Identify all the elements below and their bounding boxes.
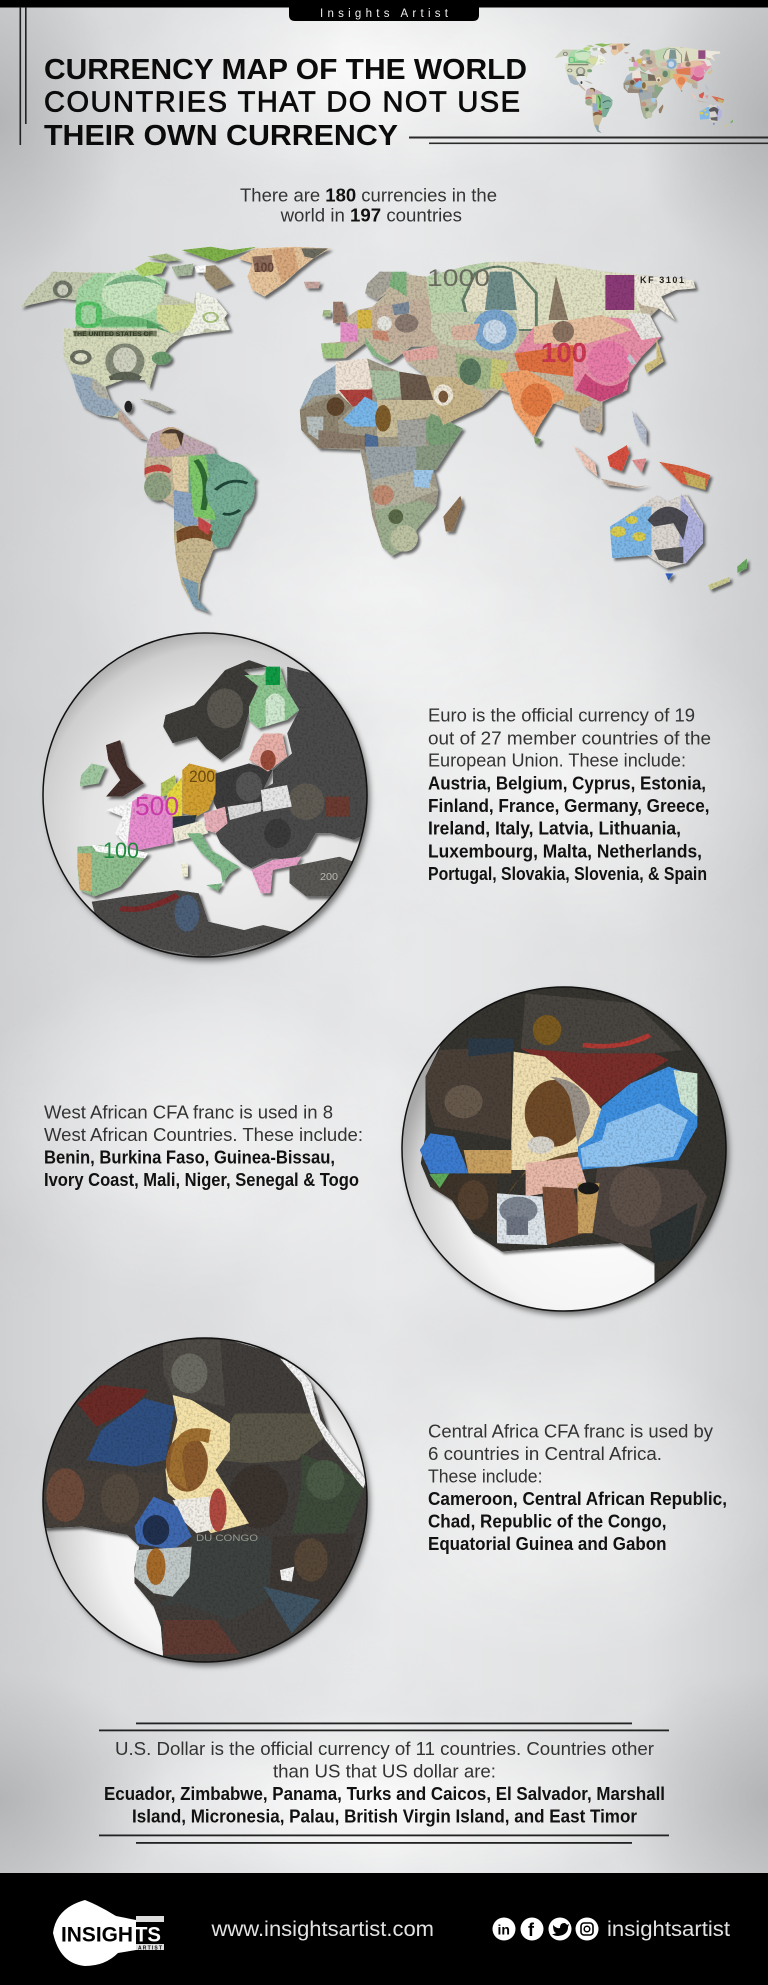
banknote numerals: 200 [189,767,215,786]
Guinea-Bissau and Senegal [420,1133,511,1188]
banknote numerals: 500 [135,791,179,821]
text: West African CFA franc [44,1102,363,1190]
website: www.insightsartist.com [210,1918,434,1941]
dark non-euro Europe [92,660,367,957]
icon: Twitter [548,1918,572,1940]
text: West African CFA franc: West African Countries. These include: [44,1125,363,1145]
social handle: insightsartist [607,1918,730,1941]
banknote numerals [103,767,338,883]
Australia and New Zealand [610,493,747,590]
dark surrounding countries [421,980,731,1287]
text: Central Africa CFA franc: These include: [428,1467,542,1487]
text: West African CFA franc: Ivory Coast, Mali, Niger, Senegal & Togo [44,1170,359,1190]
Africa [300,358,463,556]
logo: Insights Artist: TS [135,1924,161,1947]
U.S. dollar callout: than US that US dollar are: [273,1762,496,1782]
text: Central Africa CFA franc: Chad, Republic of the Congo, [428,1512,666,1532]
text: Central Africa CFA franc: Equatorial Guinea and Gabon [428,1534,666,1554]
China, Mongolia, Korea, Japan [514,313,664,402]
lake [280,1567,294,1582]
Baltics [249,733,287,772]
Niger [578,1067,697,1170]
title: CURRENCY MAP OF THE WORLD [44,54,527,86]
Chad and Central African Republic [165,1395,249,1533]
top black bar with tab [0,0,768,21]
Germany [182,763,216,817]
text: Central Africa CFA franc: 6 countries in Central Africa. [428,1444,662,1464]
Greece [251,857,301,893]
title [44,54,527,152]
text: Euro: Luxembourg, Malta, Netherlands, [428,841,702,861]
icon: Instagram [576,1918,598,1940]
banknote numerals on map: KF 3101 [640,275,684,285]
footer bar [0,1873,768,1985]
icon: LinkedIn: in [498,1922,510,1938]
logo: Insights Artist [53,1900,164,1966]
Russia and Central Asia [426,262,696,353]
France [106,793,173,850]
Benelux [161,775,182,817]
icon: Facebook [520,1918,544,1940]
banknote label: DU CONGO [196,1533,258,1543]
text: Euro: European Union. These include: [428,751,686,771]
U.S. dollar callout [99,1722,669,1844]
text: Central Africa CFA franc: Cameroon, Central African Republic, [428,1489,727,1509]
Middle East [426,353,509,425]
Central euro countries [173,802,261,842]
intro text: There are 180 currencies in the [240,186,497,206]
Italy [181,833,239,892]
U.S. dollar callout: U.S. Dollar is the official currency of 11 countries. Countries other [115,1739,654,1759]
icon: LinkedIn [492,1918,516,1940]
banknote numerals on map [73,259,684,368]
title: THEIR OWN CURRENCY [44,120,398,152]
panel: West Africa circle [402,980,731,1311]
U.S. dollar callout: Ecuador, Zimbabwe, Panama, Turks and Caicos, El Salvador, Marshall [104,1784,665,1804]
Togo and Benin [497,1157,600,1245]
banknote numerals on map: THE UNITED STATES OF [73,331,153,338]
India and South East Asia [500,370,710,490]
tab label: Insights Artist [320,8,449,20]
Burkina Faso [507,1052,602,1197]
world map thumbnail [555,43,733,133]
banknote numerals: 100 [103,838,139,863]
banknote numerals on map: 1000 [427,265,490,292]
North America [21,247,257,440]
Greenland [238,247,331,297]
text: Central Africa CFA franc [428,1421,727,1554]
banknote numerals on map: 100 [254,259,274,275]
icon: Facebook: f [528,1920,535,1940]
Finland [244,667,299,728]
logo: Insights Artist: INSIGH [61,1924,133,1947]
title double rule [409,136,768,144]
intro text: world in 197 countries [280,206,462,226]
text: Euro [428,706,711,884]
banknote numerals: 200 [320,872,338,883]
text: Euro: out of 27 member countries of the [428,728,711,748]
banknote numerals on map: 100 [541,337,587,368]
Eurasia base [321,262,696,437]
text: Euro: Austria, Belgium, Cyprus, Estonia, [428,773,706,793]
text: Euro: Portugal, Slovakia, Slovenia, & Spain [428,864,707,884]
Gabon and Congo [134,1547,192,1597]
text: West African CFA franc: Benin, Burkina Faso, Guinea-Bissau, [44,1147,335,1167]
Europe [321,272,438,363]
intro text [240,186,497,226]
title frame vertical rules [20,7,27,145]
Cameroon [134,1497,192,1550]
panel: Central Africa circle [39,1333,371,1667]
text: West African CFA franc: West African CFA franc is used in 8 [44,1102,333,1122]
panel: Euro circle [43,633,367,957]
Spain and Portugal [77,845,149,897]
South America [144,427,256,613]
logo: Insights Artist: ARTIST [138,1946,162,1952]
text: Euro: Euro is the official currency of 19 [428,706,695,726]
U.S. dollar callout: Island, Micronesia, Palau, British Virgin Island, and East Timor [132,1807,637,1827]
text: Central Africa CFA franc: Central Africa CFA franc is used by [428,1421,713,1441]
dark surrounding countries [39,1333,371,1667]
Ireland [80,763,106,787]
title: COUNTRIES THAT DO NOT USE [44,87,520,119]
Red Sea [280,1358,366,1488]
text: Euro: Ireland, Italy, Latvia, Lithuania, [428,819,681,839]
world map made of banknotes [21,247,747,613]
text: Euro: Finland, France, Germany, Greece, [428,796,710,816]
